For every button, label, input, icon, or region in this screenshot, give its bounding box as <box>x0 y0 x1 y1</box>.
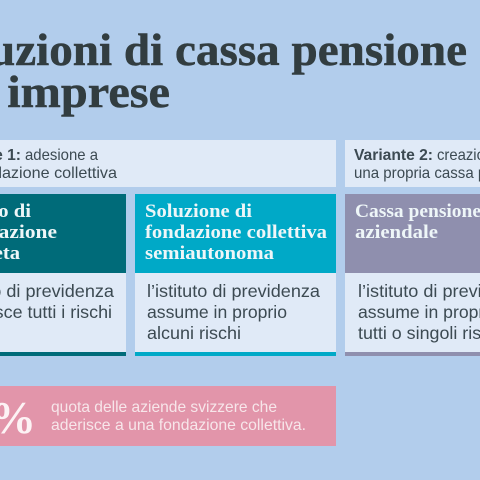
panel: variante 2: Variante 2: <box>354 147 433 164</box>
callout: quota: quota delle aziende svizzere che <box>51 399 277 416</box>
panel: soluzione semiautonoma: fondazione collettiva <box>145 222 328 243</box>
title <box>0 25 467 118</box>
bar: semiautonoma <box>135 352 336 356</box>
panel: prodotto di fondazione completa <box>0 194 126 356</box>
panel: variante 1: adesione a <box>25 147 98 164</box>
panel: soluzione semiautonoma: assume in proprio <box>147 302 287 322</box>
panel: soluzione semiautonoma: semiautonoma <box>145 243 275 264</box>
header: semiautonoma <box>135 194 336 273</box>
header: completa <box>0 194 126 273</box>
panel: cassa pensione aziendale: Cassa pensione <box>355 201 480 222</box>
panel: soluzione semiautonoma: l’istituto di previdenza <box>147 281 320 301</box>
bar: cassa pensione <box>345 352 480 356</box>
panel: cassa pensione aziendale: aziendale <box>355 222 438 243</box>
callout: quota: aderisce a una fondazione collettiva. <box>51 417 306 434</box>
panel: soluzione semiautonoma: alcuni rischi <box>147 323 241 343</box>
panel: soluzione semiautonoma <box>135 194 336 356</box>
panel: variante 2 <box>345 140 480 187</box>
callout: quota <box>0 386 336 446</box>
panel: cassa pensione aziendale <box>345 194 480 356</box>
panel: soluzione semiautonoma: Soluzione di <box>145 201 252 222</box>
panel: variante 1 <box>0 140 336 187</box>
bar: completa <box>0 352 126 356</box>
header: cassa pensione <box>345 194 480 273</box>
